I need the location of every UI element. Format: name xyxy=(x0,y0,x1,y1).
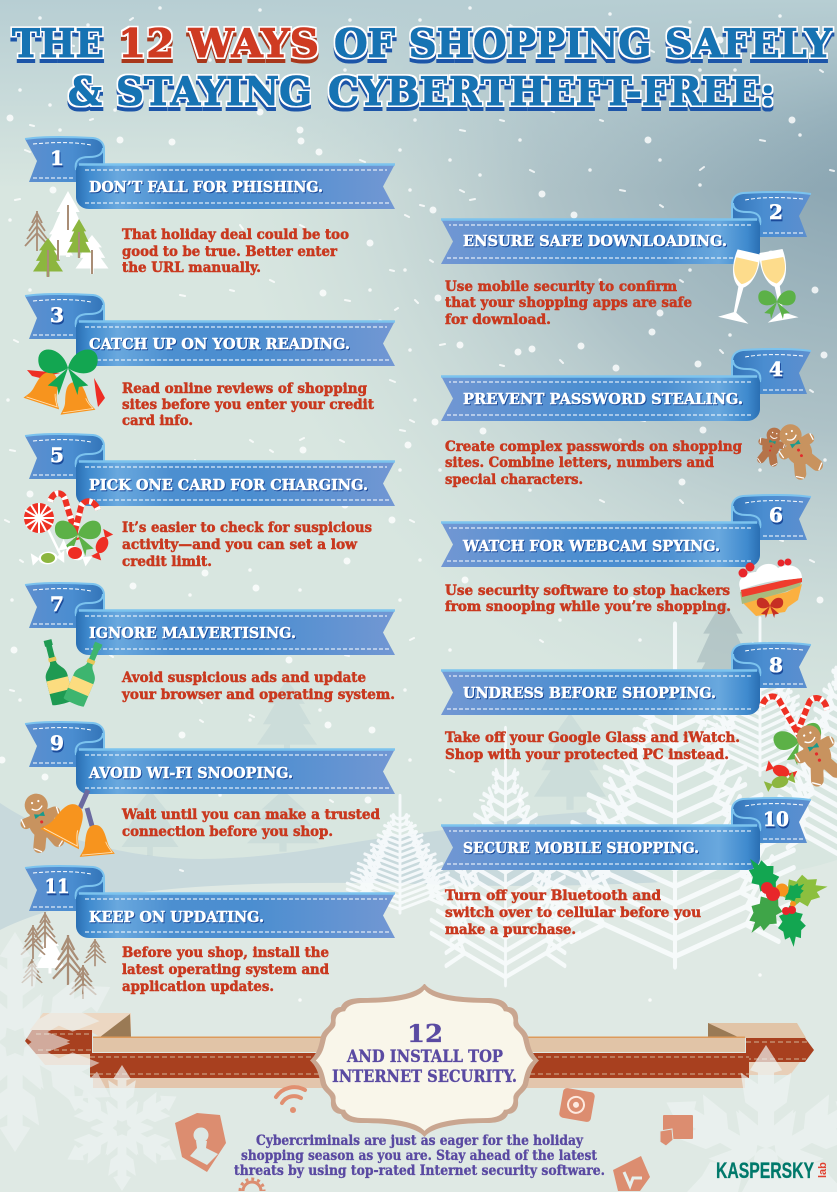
heading 5: PICK ONE CARD FOR CHARGING. xyxy=(89,477,368,494)
ribbon 4 xyxy=(441,349,811,421)
body text 1: That holiday deal could be too xyxy=(122,227,349,243)
title: STAYING xyxy=(116,69,312,115)
body text 4: Create complex passwords on shopping xyxy=(445,439,742,455)
ribbon 6 xyxy=(441,495,811,567)
heading 3: CATCH UP ON YOUR READING. xyxy=(89,336,350,353)
plaque text: INTERNET SECURITY. xyxy=(332,1067,517,1086)
title: & xyxy=(68,69,102,115)
heading 1: DON’T FALL FOR PHISHING. xyxy=(89,179,323,196)
icon: holly xyxy=(739,850,830,948)
body text 11: application updates. xyxy=(122,979,274,995)
icon: brown and white trees xyxy=(21,912,106,999)
body text 8 xyxy=(445,730,740,763)
body text 3: sites before you enter your credit xyxy=(122,397,375,413)
step 7: malvertising xyxy=(25,583,395,708)
number 7: 7 xyxy=(50,592,64,616)
icon: gingerbread men xyxy=(755,417,827,483)
background white snowy trees xyxy=(346,616,837,988)
step 4: passwords xyxy=(441,349,827,488)
step 5: one card xyxy=(24,434,395,570)
number 8: 8 xyxy=(769,653,783,677)
body text 11: Before you shop, install the xyxy=(122,945,329,961)
body text 6: Use security software to stop hackers xyxy=(445,583,730,599)
icon: person shield xyxy=(175,1113,226,1172)
step 3: reading xyxy=(23,294,395,429)
security icons xyxy=(175,1087,693,1191)
body text 8: Shop with your protected PC instead. xyxy=(445,747,729,763)
body text 1: the URL manually. xyxy=(122,260,261,276)
title: THE xyxy=(12,21,104,67)
left tail xyxy=(25,1013,131,1065)
step 2: downloading xyxy=(441,192,811,328)
plaque text xyxy=(332,1019,517,1086)
ribbon 1 xyxy=(25,137,395,209)
icon: gingerbread and bells xyxy=(15,788,115,857)
plaque xyxy=(310,984,539,1137)
body text 10: Turn off your Bluetooth and xyxy=(445,888,661,904)
icon: canes, gingerbread and candy xyxy=(759,693,837,792)
icon: bells and bow xyxy=(23,349,105,415)
icon: champagne bottles xyxy=(37,637,109,708)
ribbon 5 xyxy=(25,434,395,506)
body text 4: sites. Combine letters, numbers and xyxy=(445,455,714,471)
number 9: 9 xyxy=(50,731,64,755)
body text 5 xyxy=(122,520,372,570)
closing paragraph: Cybercriminals are just as eager for the holiday xyxy=(256,1133,584,1149)
ribbon 10 xyxy=(441,798,811,870)
Kaspersky Lab logo: lab xyxy=(817,1162,829,1178)
icon: check shield xyxy=(613,1156,650,1191)
body text 10: switch over to cellular before you xyxy=(445,905,701,921)
background snowflakes xyxy=(0,933,837,1192)
number 6: 6 xyxy=(769,503,783,527)
plaque frame xyxy=(310,984,539,1137)
main band xyxy=(90,1036,749,1088)
number 10: 10 xyxy=(763,807,789,831)
title xyxy=(12,21,833,115)
body text 5: It’s easier to check for suspicious xyxy=(122,520,372,536)
icon: champagne glasses xyxy=(718,248,799,324)
body text 2: for download. xyxy=(445,312,551,328)
body text 7: your browser and operating system. xyxy=(121,687,395,703)
heading 8: UNDRESS BEFORE SHOPPING. xyxy=(463,685,716,702)
icon: gear xyxy=(240,1179,264,1191)
heading 10: SECURE MOBILE SHOPPING. xyxy=(463,840,699,857)
body text 7 xyxy=(121,670,395,703)
closing paragraph xyxy=(234,1133,605,1179)
step 6: webcam xyxy=(441,495,811,618)
body text 5: credit limit. xyxy=(122,554,212,570)
ribbon 8 xyxy=(441,643,811,715)
body text 10 xyxy=(445,888,701,938)
plaque text: AND INSTALL TOP xyxy=(346,1047,503,1066)
ribbon banner xyxy=(25,1013,814,1088)
icon: wifi xyxy=(276,1087,305,1113)
ribbon 7 xyxy=(25,583,395,655)
body text 9: connection before you shop. xyxy=(122,824,333,840)
body text 3: Read online reviews of shopping xyxy=(122,381,367,397)
ribbon 11 xyxy=(25,866,395,938)
icon: snowy trees xyxy=(25,191,108,277)
icon: window and shield xyxy=(660,1115,693,1146)
plaque text: 12 xyxy=(407,1019,443,1048)
heading 4: PREVENT PASSWORD STEALING. xyxy=(463,391,743,408)
number 1: 1 xyxy=(50,146,64,170)
ribbon 3 xyxy=(25,294,395,366)
icon: candy canes and lollipop xyxy=(24,493,114,567)
right tail xyxy=(708,1023,814,1075)
body text 10: make a purchase. xyxy=(445,922,576,938)
body text 9: Wait until you can make a trusted xyxy=(121,807,380,823)
step 10: mobile xyxy=(441,798,830,948)
heading 9: AVOID WI-FI SNOOPING. xyxy=(88,765,293,782)
icon: safe xyxy=(559,1087,595,1123)
ribbon 9 xyxy=(25,722,395,794)
body text 11: latest operating system and xyxy=(122,962,329,978)
closing paragraph: shopping season as you are. Stay ahead of the latest xyxy=(241,1148,598,1164)
number 2: 2 xyxy=(769,200,783,224)
title: 12 WAYS xyxy=(118,21,319,67)
number 11: 11 xyxy=(44,874,70,898)
body text 1 xyxy=(122,227,349,276)
body text 2: Use mobile security to confirm xyxy=(445,279,677,295)
step 8: undress xyxy=(441,643,837,792)
step 11: updating xyxy=(21,866,395,999)
number 4: 4 xyxy=(769,357,783,381)
body text 11 xyxy=(122,945,329,995)
title: OF SHOPPING SAFELY xyxy=(334,21,833,67)
heading 6: WATCH FOR WEBCAM SPYING. xyxy=(462,538,720,555)
title: CYBERTHEFT-FREE: xyxy=(328,69,775,115)
ribbon 2 xyxy=(441,192,811,264)
background grey pine trees xyxy=(122,600,756,856)
body text 1: good to be true. Better enter xyxy=(122,244,338,260)
body text 2: that your shopping apps are safe xyxy=(445,295,692,311)
icon: cupcakes xyxy=(738,558,802,618)
heading 2: ENSURE SAFE DOWNLOADING. xyxy=(463,233,727,250)
body text 8: Take off your Google Glass and iWatch. xyxy=(445,730,740,746)
heading 11: KEEP ON UPDATING. xyxy=(89,909,264,926)
body text 5: activity—and you can set a low xyxy=(122,537,358,553)
body text 6: from snooping while you’re shopping. xyxy=(445,599,731,615)
closing paragraph: threats by using top-rated Internet security software. xyxy=(234,1163,605,1179)
number 5: 5 xyxy=(50,443,64,467)
body text 4 xyxy=(445,439,742,488)
step 9: wi-fi xyxy=(15,722,395,857)
step 1: phishing xyxy=(25,137,395,277)
body text 6 xyxy=(445,583,731,615)
heading 7: IGNORE MALVERTISING. xyxy=(89,625,296,642)
body text 9 xyxy=(121,807,380,840)
body text 2 xyxy=(445,279,692,328)
body text 4: special characters. xyxy=(445,472,583,488)
body text 3: card info. xyxy=(122,413,193,429)
plaque inner xyxy=(315,989,534,1132)
body text 3 xyxy=(122,381,375,429)
number 3: 3 xyxy=(50,303,64,327)
body text 7: Avoid suspicious ads and update xyxy=(121,670,366,686)
